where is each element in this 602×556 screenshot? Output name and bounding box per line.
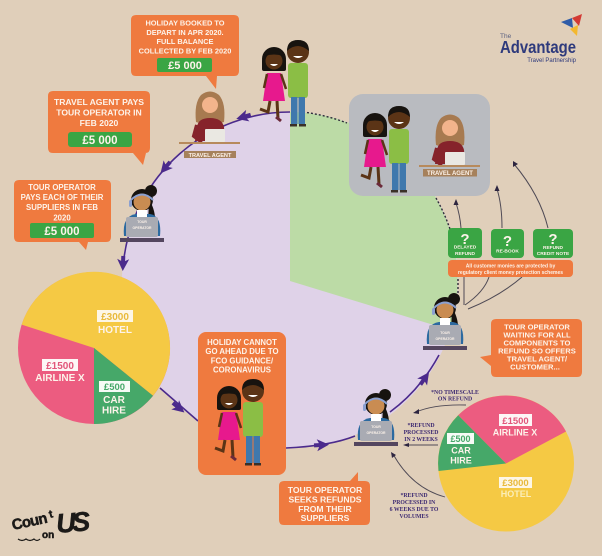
option: refund credit note: REFUND bbox=[543, 245, 564, 251]
label: hotel: £3000 bbox=[101, 312, 129, 323]
label: airline: AIRLINE X bbox=[493, 428, 537, 438]
logo: The Advantage Travel Partnership: The bbox=[500, 33, 512, 40]
label: hotel: £3000 bbox=[502, 478, 529, 489]
label: airline bbox=[35, 359, 85, 384]
pie chart: supplier refunds bbox=[438, 396, 574, 532]
note: no timescale on refund: *NO TIMESCALE bbox=[431, 390, 479, 396]
callout: travel agent pays: FEB 2020 bbox=[80, 118, 119, 128]
label: car hire bbox=[447, 433, 474, 466]
note: refund in 2 weeks: *REFUND bbox=[407, 423, 435, 429]
callout: holiday booked: FULL BALANCE bbox=[157, 37, 214, 46]
callout: tour operator pays: 2020 bbox=[53, 214, 71, 222]
logo: Count on Us bbox=[10, 506, 91, 541]
tour operator: seeking refunds bbox=[354, 389, 398, 446]
panel: holiday cannot go ahead: CORONAVIRUS bbox=[213, 366, 271, 374]
timeline circle bbox=[122, 112, 458, 448]
tour operator: first bbox=[120, 185, 164, 242]
callout: tour operator waiting: CUSTOMER... bbox=[510, 362, 560, 372]
tour operator: waiting: OPERATOR bbox=[436, 337, 455, 341]
tour operator: waiting bbox=[423, 293, 467, 350]
notice: client money protection: All customer monies are protected by bbox=[466, 264, 555, 270]
note: refund in 6 weeks: 6 WEEKS DUE TO bbox=[390, 507, 439, 513]
logo: Count on Us: US bbox=[55, 506, 91, 539]
option: refund credit note bbox=[533, 229, 573, 258]
tour operator: waiting: TOUR bbox=[440, 331, 450, 335]
label: car hire: HIRE bbox=[450, 456, 472, 466]
label: car hire: CAR bbox=[103, 395, 126, 406]
note: no timescale on refund: ON REFUND bbox=[438, 396, 472, 402]
callout: tour operator seeks refunds: SEEKS REFUNDS bbox=[288, 494, 362, 504]
note: refund in 2 weeks: IN 2 WEEKS bbox=[404, 437, 438, 443]
option: delayed refund: ? bbox=[460, 231, 470, 248]
callout: tour operator seeks refunds: SUPPLIERS bbox=[301, 513, 350, 523]
callout: tour operator waiting bbox=[480, 319, 582, 377]
callout: tour operator pays: TOUR OPERATOR bbox=[28, 183, 96, 192]
callout: tour operator waiting: TRAVEL AGENT/ bbox=[507, 354, 568, 364]
panel: holiday cannot go ahead: FCO GUIDANCE/ bbox=[211, 356, 274, 366]
note: refund in 6 weeks: VOLUMES bbox=[399, 514, 429, 520]
label: hotel: HOTEL bbox=[98, 325, 132, 336]
callout: travel agent pays: TRAVEL AGENT PAYS bbox=[54, 97, 144, 107]
couple bbox=[215, 379, 264, 466]
travel agent: top: TRAVEL AGENT bbox=[189, 153, 232, 159]
note: refund in 2 weeks bbox=[403, 423, 438, 447]
logo: The Advantage Travel Partnership bbox=[500, 14, 582, 64]
pie chart: supplier payments bbox=[18, 272, 170, 424]
couple bbox=[361, 106, 410, 192]
callout: tour operator waiting: TOUR OPERATOR bbox=[504, 322, 570, 332]
arrows: options to outcomes bbox=[454, 161, 548, 309]
notice: client money protection bbox=[448, 260, 573, 277]
travel agent: TRAVEL AGENT bbox=[427, 171, 473, 177]
option: re-book: RE-BOOK bbox=[496, 248, 519, 254]
label: hotel bbox=[499, 477, 532, 499]
panel: holiday cannot go ahead bbox=[198, 332, 286, 475]
option: delayed refund: DELAYED bbox=[454, 244, 477, 250]
tour operator: seeking refunds: OPERATOR bbox=[367, 431, 386, 435]
label: car hire: CAR bbox=[451, 446, 471, 456]
option: re-book: ? bbox=[503, 233, 512, 250]
logo: Count on Us: on bbox=[42, 530, 54, 541]
panel: holiday cannot go ahead: HOLIDAY CANNOT bbox=[207, 338, 277, 347]
logo: Count on Us: t bbox=[48, 508, 55, 521]
option: refund credit note: CREDIT NOTE bbox=[537, 251, 570, 257]
travel agent bbox=[419, 114, 480, 177]
callout: tour operator pays bbox=[14, 180, 111, 250]
notice: client money protection: regulatory client money protection schemes bbox=[458, 270, 563, 276]
purple flow arrows bbox=[117, 109, 439, 451]
callout: tour operator pays: SUPPLIERS IN FEB bbox=[26, 203, 98, 212]
callout: tour operator seeks refunds: FROM THEIR bbox=[298, 504, 353, 514]
callout: tour operator waiting: REFUND SO OFFERS bbox=[498, 346, 576, 356]
callout: holiday booked: COLLECTED BY FEB 2020 bbox=[139, 46, 231, 56]
note: refund in 6 weeks: PROCESSED IN bbox=[393, 500, 436, 506]
callout: tour operator pays: PAYS EACH OF THEIR bbox=[21, 193, 104, 202]
logo: Count on Us: Coun bbox=[10, 510, 49, 534]
label: car hire: £500 bbox=[104, 382, 125, 393]
callout: tour operator seeks refunds: TOUR OPERATOR bbox=[288, 485, 363, 495]
callout: tour operator pays: £5 000 bbox=[44, 226, 80, 238]
label: car hire bbox=[99, 381, 130, 416]
option: delayed refund bbox=[448, 228, 482, 258]
label: hotel: HOTEL bbox=[501, 489, 532, 499]
label: airline: £1500 bbox=[46, 361, 74, 372]
option: refund credit note: ? bbox=[548, 231, 558, 248]
callout: tour operator waiting: COMPONENTS TO bbox=[504, 338, 571, 348]
callout: holiday booked: DEPART IN APR 2020. bbox=[146, 28, 224, 37]
note: no timescale on refund bbox=[413, 390, 479, 414]
tour operator: first: TOUR bbox=[137, 220, 147, 224]
logo: The Advantage Travel Partnership: Travel Partnership bbox=[527, 58, 577, 64]
label: hotel bbox=[97, 310, 133, 336]
label: airline: £1500 bbox=[502, 416, 529, 427]
label: airline: AIRLINE X bbox=[35, 373, 85, 384]
tour operator: first: OPERATOR bbox=[133, 226, 152, 230]
note: refund in 2 weeks: PROCESSED bbox=[404, 430, 438, 436]
callout: tour operator seeks refunds bbox=[279, 472, 370, 525]
logo: The Advantage Travel Partnership: Advantage bbox=[500, 37, 576, 57]
tour operator: seeking refunds: TOUR bbox=[371, 425, 381, 429]
callout: holiday booked: HOLIDAY BOOKED TO bbox=[145, 18, 225, 28]
label: airline bbox=[493, 414, 537, 438]
panel: customer and travel agent bbox=[349, 94, 490, 196]
callout: tour operator waiting: WAITING FOR ALL bbox=[503, 330, 571, 340]
travel agent: top bbox=[179, 92, 240, 159]
option: delayed refund: REFUND bbox=[455, 251, 476, 257]
callout: travel agent pays: TOUR OPERATOR IN bbox=[56, 108, 142, 118]
green wedge: refund held bbox=[290, 112, 458, 330]
label: car hire: £500 bbox=[450, 434, 471, 444]
note: refund in 6 weeks bbox=[390, 452, 445, 520]
callout: holiday booked bbox=[131, 15, 239, 89]
callout: holiday booked: £5 000 bbox=[168, 60, 202, 72]
couple: booking bbox=[260, 40, 309, 126]
option: re-book bbox=[491, 229, 524, 258]
callout: travel agent pays: £5 000 bbox=[82, 135, 118, 147]
label: car hire: HIRE bbox=[102, 406, 126, 416]
note: refund in 6 weeks: *REFUND bbox=[400, 493, 428, 499]
callout: travel agent pays bbox=[48, 91, 150, 165]
dashed arc bbox=[303, 112, 458, 300]
panel: holiday cannot go ahead: GO AHEAD DUE TO bbox=[205, 347, 279, 356]
